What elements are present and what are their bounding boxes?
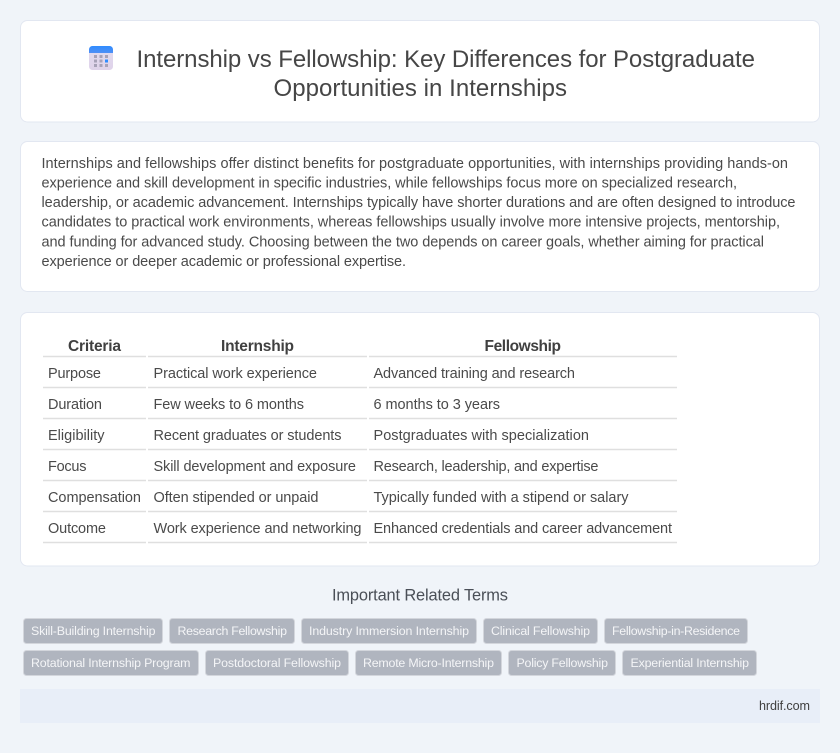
table header: Internship [221,338,294,355]
row: compensation: Often stipended or unpaid [154,490,318,506]
tag [508,650,616,676]
tag [604,618,748,644]
row: duration [48,397,500,413]
tag: Experiential Internship [630,656,749,670]
tag: Clinical Fellowship [491,624,590,638]
text block: introduction paragraph [42,156,796,270]
table header [68,338,561,355]
tag: Remote Micro-Internship [363,656,494,670]
text block: introduction paragraph: leadership, or academic advancement. Internships typically have shorter durations and are often designed to introduce [42,195,796,211]
row: eligibility: Eligibility [48,428,105,444]
row: purpose: Practical work experience [154,366,317,382]
title: Opportunities in Internships [274,75,567,102]
row: outcome: Work experience and networking [154,521,362,537]
table header: Fellowship [484,338,561,355]
row: purpose: Advanced training and research [374,366,575,382]
tag [24,650,198,676]
row: duration: 6 months to 3 years [374,397,500,413]
row: purpose [48,366,575,382]
tag: Rotational Internship Program [31,656,190,670]
text block: introduction paragraph: Internships and fellowships offer distinct benefits for postgraduate opportunities, with internships providing hands-on [42,156,788,172]
row: eligibility: Postgraduates with specialization [374,428,589,444]
text block: introduction paragraph: and funding for advanced study. Choosing between the two depends on career goals, whether aiming for practical [42,234,764,250]
row: focus: Research, leadership, and expertise [374,459,598,475]
text block: introduction paragraph: experience and skill development in specific industries, while fellowships focus more on specialized research, [42,176,737,192]
row: outcome [48,521,672,537]
row: eligibility: Recent graduates or students [154,428,342,444]
panel: comparison table [20,312,820,566]
row: compensation [48,490,629,506]
row: focus: Focus [48,459,86,475]
footer [20,689,820,723]
tag: Research Fellowship [178,624,287,638]
table header: Criteria [68,338,121,355]
tag: Industry Immersion Internship [309,624,469,638]
panel: introduction [20,142,820,292]
row: outcome: Enhanced credentials and career advancement [374,521,672,537]
title [136,46,755,102]
tag: Policy Fellowship [516,656,608,670]
text block: introduction paragraph: experience or deeper academic or professional expertise. [42,254,406,270]
row: duration: Few weeks to 6 months [154,397,304,413]
row: compensation: Compensation [48,490,141,506]
row: duration: Duration [48,397,102,413]
row: eligibility [48,428,589,444]
heading: important related terms: Important Related Terms [332,586,508,604]
footer: hrdif.com [759,699,810,713]
row: outcome: Outcome [48,521,106,537]
row: compensation: Typically funded with a stipend or salary [374,490,629,506]
tag [484,618,598,644]
tag [622,650,756,676]
row: focus [48,459,598,475]
tag: Skill-Building Internship [31,624,156,638]
tag [356,650,502,676]
tag: Fellowship-in-Residence [612,624,740,638]
tag: Postdoctoral Fellowship [213,656,341,670]
text block: introduction paragraph: candidates to practical work environments, whereas fellowships usually involve more intensive projects, mentorship, [42,215,780,231]
title: Internship vs Fellowship: Key Differences for Postgraduate [136,46,755,73]
row: purpose: Purpose [48,366,101,382]
row: focus: Skill development and exposure [154,459,356,475]
tag [206,650,348,676]
tag [24,618,162,644]
tag [302,618,476,644]
icon: calendar [89,46,113,70]
panel: title card [20,20,820,122]
tag [170,618,294,644]
tags: related terms [24,618,756,676]
